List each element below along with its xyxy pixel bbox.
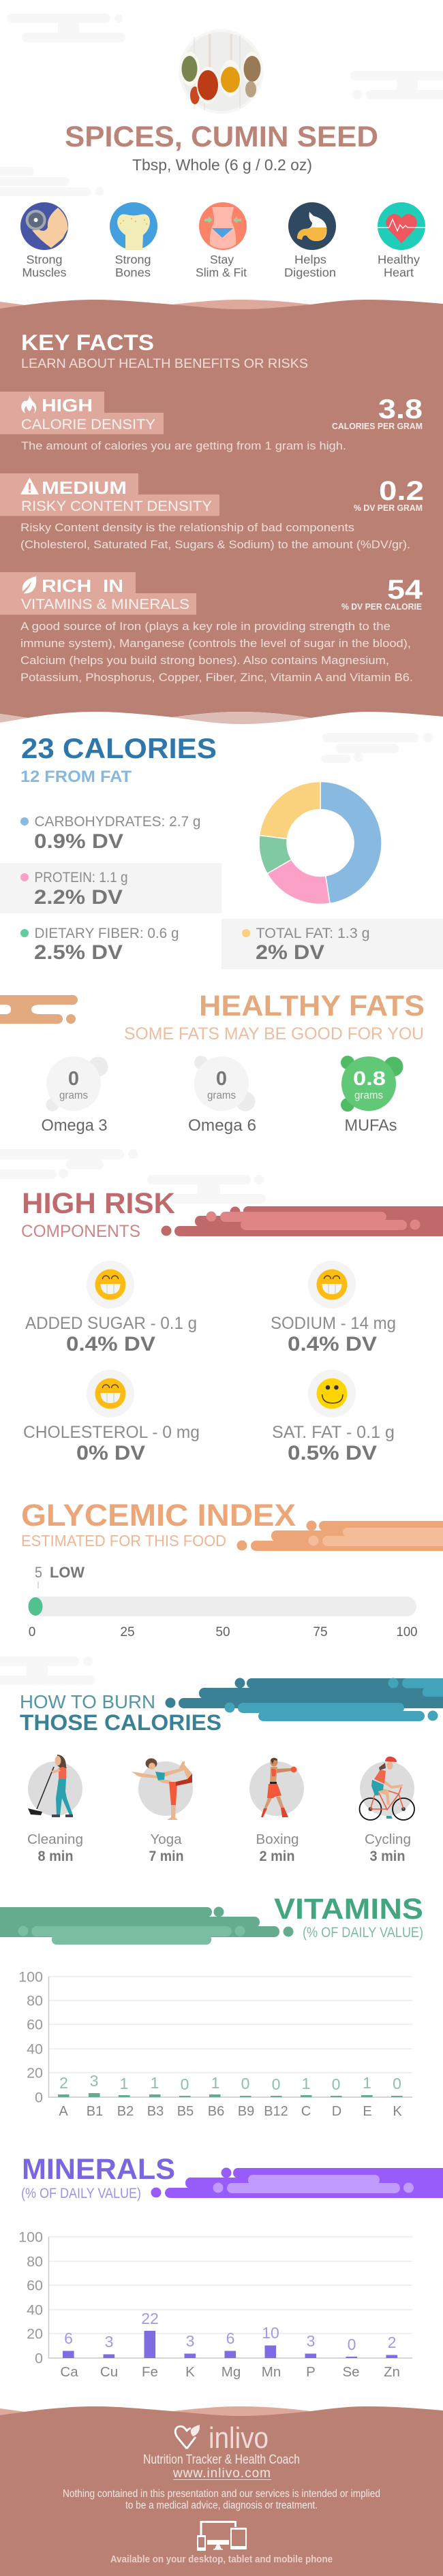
- banner decoration: [0, 1907, 293, 1945]
- bar chart: minerals: 3: [186, 2332, 194, 2350]
- item: cholesterol: 0% DV: [76, 1442, 145, 1464]
- bar chart: minerals: 100: [18, 2229, 43, 2245]
- stat: omega 6: 0: [216, 1068, 227, 1090]
- banner decoration: [237, 1520, 443, 1551]
- item: saturated fat: [272, 1370, 395, 1464]
- activity label: yoga: 7 min: [149, 1849, 184, 1864]
- bar chart: vitamins: B12: [264, 2104, 288, 2119]
- bar chart: vitamins: 0: [241, 2075, 249, 2092]
- banner decoration: [0, 995, 78, 1024]
- stat: omega 3: [41, 1056, 108, 1135]
- bar chart: minerals: Cu: [100, 2364, 118, 2380]
- panel: glycemic index: [21, 1498, 443, 1639]
- fact: rich in vitamins and minerals: RICH IN: [42, 576, 123, 596]
- gauge bar: [29, 1597, 416, 1616]
- gauge axis labels: 75: [313, 1625, 328, 1639]
- activity label: cycling: [365, 1832, 411, 1864]
- heading: glycemic index: GLYCEMIC INDEX: [21, 1498, 296, 1533]
- bar chart: vitamins: B2: [117, 2104, 134, 2119]
- donut chart: [259, 781, 382, 905]
- stat: omega 6: grams: [207, 1090, 236, 1101]
- heading: calories: 23 CALORIES: [21, 732, 217, 764]
- subheading: ESTIMATED FOR THIS FOOD: [21, 1532, 226, 1550]
- item: sodium: 0.4% DV: [288, 1333, 377, 1355]
- activity: boxing: [249, 1757, 304, 1817]
- bar chart: vitamins: B5: [177, 2104, 194, 2119]
- bar chart: vitamins: K: [393, 2104, 402, 2119]
- fact: calorie density: HIGH: [42, 395, 93, 415]
- gauge axis labels: 0: [29, 1625, 35, 1639]
- bar chart: vitamins: B1: [87, 2104, 103, 2119]
- item: sodium: [271, 1261, 396, 1355]
- icon: warning triangle: [20, 477, 39, 494]
- item: cholesterol: [23, 1370, 200, 1464]
- activity: cleaning: [28, 1755, 82, 1817]
- subheading: from fat: 12 FROM FAT: [20, 768, 132, 786]
- bar chart: vitamins: A: [59, 2104, 68, 2119]
- activity label: yoga: Yoga: [150, 1832, 182, 1847]
- legend: protein: 2.2% DV: [34, 886, 123, 909]
- fact: rich in vitamins and minerals: % DV PER CALORIE: [341, 601, 422, 612]
- item: added sugar: [25, 1261, 197, 1355]
- bar chart: vitamins: 2: [59, 2074, 68, 2092]
- legend: dietary fiber: [20, 926, 179, 964]
- panel: calories: [0, 732, 443, 969]
- bar chart: vitamins: 0: [35, 2090, 43, 2106]
- bar chart: minerals: 40: [27, 2302, 43, 2319]
- disclaimer: [63, 2488, 380, 2511]
- fact: rich in vitamins and minerals: immune system), Manganese (controls the level of sugar in the blood),: [20, 638, 411, 650]
- bar chart: vitamins: 0: [332, 2075, 340, 2093]
- item: saturated fat: 0.5% DV: [288, 1442, 377, 1464]
- icon: helps digestion: Helps: [294, 253, 326, 266]
- stat: MUFAs: MUFAs: [345, 1116, 397, 1135]
- panel: footer: [0, 2406, 443, 2576]
- heading: minerals: MINERALS: [22, 2153, 175, 2186]
- fact: risky content density: (Cholesterol, Saturated Fat, Sugars & Sodium) to the amount (%DV/gr).: [20, 539, 410, 551]
- legend: dietary fiber: 2.5% DV: [34, 941, 123, 964]
- activity: cycling: [360, 1757, 414, 1820]
- gauge value: [35, 1564, 85, 1588]
- stat: omega 6: Omega 6: [188, 1116, 256, 1135]
- icon: healthy heart: Heart: [384, 266, 414, 279]
- item: added sugar: 0.4% DV: [66, 1333, 155, 1355]
- gauge value: LOW: [50, 1564, 85, 1581]
- bar chart: vitamins: 20: [27, 2065, 43, 2082]
- bar chart: minerals: 3: [105, 2333, 113, 2351]
- bar chart: minerals: 10: [262, 2324, 279, 2342]
- heading: those calories: THOSE CALORIES: [20, 1710, 222, 1735]
- bar chart: vitamins: 60: [27, 2016, 43, 2032]
- fact: calorie density: CALORIE DENSITY: [21, 417, 155, 433]
- fact: calorie density: [0, 392, 423, 452]
- fact: risky content density: % DV PER GRAM: [354, 503, 423, 513]
- stat: omega 3: Omega 3: [41, 1116, 108, 1135]
- heading: vitamins: VITAMINS: [274, 1893, 423, 1926]
- bar chart: minerals: Ca: [60, 2364, 78, 2380]
- stat: MUFAs: [341, 1056, 403, 1135]
- website link: www.inlivo.com: [172, 2466, 271, 2481]
- bar chart: vitamins: E: [363, 2104, 372, 2119]
- bar chart: vitamins: B6: [208, 2104, 224, 2119]
- icon: strong muscles: Strong: [26, 253, 63, 266]
- bar chart: vitamins: C: [301, 2104, 311, 2119]
- bar chart: vitamins: 80: [27, 1993, 43, 2009]
- bar chart: vitamins: 1: [151, 2074, 159, 2092]
- item: saturated fat: SAT. FAT - 0.1 g: [272, 1423, 395, 1442]
- subheading: components: COMPONENTS: [21, 1222, 140, 1241]
- fact: rich in vitamins and minerals: VITAMINS & MINERALS: [21, 597, 189, 612]
- bar chart: vitamins: 0: [272, 2075, 280, 2093]
- bar chart: vitamins: D: [332, 2104, 341, 2119]
- panel: healthy fats: [0, 990, 425, 1135]
- bar chart: minerals: Mn: [262, 2364, 281, 2380]
- legend: protein: [20, 870, 128, 909]
- panel: minerals: [18, 2153, 443, 2380]
- subheading: percent of daily value: (% OF DAILY VALUE): [21, 2186, 141, 2201]
- stat: omega 3: 0: [68, 1068, 79, 1090]
- bar chart: vitamins: 1: [363, 2074, 371, 2092]
- icon: healthy heart: [378, 202, 425, 279]
- fact: calorie density: The amount of calories you are getting from 1 gram is high.: [21, 440, 346, 452]
- fact: risky content density: MEDIUM: [42, 477, 127, 498]
- bar chart: vitamins: 3: [90, 2072, 98, 2090]
- bar chart: minerals: Fe: [142, 2364, 158, 2380]
- activity label: cycling: 3 min: [369, 1849, 405, 1864]
- disclaimer: to be a medical advice, diagnosis or treatment.: [125, 2500, 318, 2511]
- item: cholesterol: CHOLESTEROL - 0 mg: [23, 1423, 200, 1442]
- icon: strong muscles: Muscles: [22, 266, 67, 279]
- bar chart: minerals: 0: [35, 2350, 43, 2366]
- fact: calorie density: 3.8: [378, 394, 423, 424]
- gauge axis labels: [29, 1625, 417, 1639]
- bar chart: minerals: 80: [27, 2253, 43, 2269]
- activity label: cleaning: Cleaning: [27, 1832, 83, 1847]
- legend: carbohydrates: [20, 814, 200, 853]
- bar chart: vitamins: 0: [393, 2075, 401, 2092]
- icon: strong muscles: [20, 202, 68, 279]
- item: added sugar: ADDED SUGAR - 0.1 g: [25, 1314, 197, 1333]
- heading: key facts: KEY FACTS: [21, 330, 154, 355]
- logo: inlivo: [175, 2421, 269, 2455]
- gauge axis labels: 50: [215, 1625, 230, 1639]
- legend: protein: PROTEIN: 1.1 g: [34, 870, 128, 885]
- icon: slim and fit: Stay: [210, 253, 234, 266]
- availability note: Available on your desktop, tablet and mobile phone: [110, 2554, 333, 2565]
- icon: healthy heart: Healthy: [378, 253, 420, 266]
- icon: desktop, tablet and mobile: [197, 2521, 247, 2551]
- bar chart: minerals: P: [306, 2364, 316, 2380]
- activity label: cycling: Cycling: [365, 1832, 411, 1847]
- activity label: boxing: Boxing: [256, 1832, 299, 1847]
- bar chart: minerals: Mg: [222, 2364, 241, 2380]
- legend: carbohydrates: CARBOHYDRATES: 2.7 g: [34, 814, 200, 830]
- heading: how to burn: HOW TO BURN: [20, 1691, 155, 1712]
- panel: vitamins: [0, 1893, 423, 2119]
- icon: strong bones: Strong: [114, 253, 151, 266]
- gauge axis labels: 100: [397, 1625, 417, 1639]
- food photo: spices on spoons: [179, 29, 263, 114]
- fact: risky content density: RISKY CONTENT DENSITY: [21, 499, 212, 514]
- serving subtitle: Tbsp, Whole (6 g / 0.2 oz): [132, 156, 312, 174]
- banner decoration: [151, 2167, 443, 2198]
- gauge axis labels: 25: [120, 1625, 135, 1639]
- bar chart: minerals: [18, 2229, 412, 2380]
- subheading: SOME FATS MAY BE GOOD FOR YOU: [124, 1024, 424, 1043]
- subheading: LEARN ABOUT HEALTH BENEFITS OR RISKS: [21, 356, 308, 371]
- icon: flame: [21, 395, 36, 413]
- heading: healthy fats: HEALTHY FATS: [199, 990, 425, 1022]
- icon: leaf: [22, 576, 36, 593]
- bar chart: minerals: 60: [27, 2278, 43, 2294]
- item: sodium: SODIUM - 14 mg: [271, 1314, 396, 1333]
- panel: high risk components: [21, 1187, 443, 1464]
- panel: key facts: [0, 300, 443, 724]
- legend: total fat: TOTAL FAT: 1.3 g: [256, 926, 370, 941]
- activity label: boxing: 2 min: [259, 1849, 294, 1864]
- bar chart: minerals: Zn: [384, 2364, 400, 2380]
- fact: rich in vitamins and minerals: A good source of Iron (plays a key role in providing strength to the: [20, 621, 391, 633]
- benefit icons row: [20, 202, 425, 279]
- stat: MUFAs: grams: [354, 1090, 383, 1101]
- fact: rich in vitamins and minerals: 54: [387, 575, 423, 605]
- subheading: percent of daily value: (% OF DAILY VALUE): [303, 1925, 423, 1941]
- fact: rich in vitamins and minerals: Calcium (helps you build strong bones). Also contains Magnesium,: [20, 655, 389, 667]
- bar chart: minerals: K: [185, 2364, 195, 2380]
- gauge value: 5: [35, 1564, 42, 1581]
- title: SPICES, CUMIN SEED: [65, 121, 378, 153]
- tagline: Nutrition Tracker & Health Coach: [143, 2453, 300, 2467]
- fact: risky content density: 0.2: [379, 476, 424, 506]
- activity label: cleaning: [27, 1832, 83, 1864]
- legend: dietary fiber: DIETARY FIBER: 0.6 g: [34, 926, 179, 941]
- fact: rich in vitamins and minerals: Potassium, Phosphorus, Copper, Fiber, Zinc, Vitamin A and Vitamin B6.: [20, 672, 413, 684]
- activity: yoga: [132, 1759, 193, 1820]
- activity label: yoga: [149, 1832, 184, 1864]
- panel: how to burn those calories: [20, 1678, 443, 1864]
- fact: risky content density: [0, 473, 424, 551]
- legend: carbohydrates: 0.9% DV: [34, 830, 123, 853]
- bar chart: vitamins: 1: [120, 2075, 128, 2092]
- icon: strong bones: Bones: [115, 266, 151, 279]
- legend: total fat: [242, 926, 370, 964]
- bar chart: vitamins: B3: [147, 2104, 164, 2119]
- bar chart: vitamins: 1: [211, 2074, 219, 2092]
- stat: MUFAs: 0.8: [353, 1068, 386, 1090]
- bar chart: minerals: 20: [27, 2325, 43, 2342]
- stat: omega 6: [188, 1056, 256, 1135]
- activity label: cleaning: 8 min: [38, 1849, 74, 1864]
- bar chart: vitamins: 1: [302, 2075, 310, 2092]
- icon: helps digestion: Digestion: [284, 266, 336, 279]
- activity label: boxing: [256, 1832, 299, 1864]
- bar chart: vitamins: 40: [27, 2041, 43, 2057]
- fact: rich in vitamins and minerals: [0, 572, 423, 684]
- icon: helps digestion: [284, 202, 336, 279]
- bar chart: vitamins: 0: [181, 2075, 189, 2093]
- bar chart: minerals: 22: [141, 2310, 159, 2327]
- disclaimer: Nothing contained in this presentation and our services is intended or implied: [63, 2488, 380, 2500]
- bar chart: vitamins: B9: [238, 2104, 254, 2119]
- bar chart: minerals: Se: [342, 2364, 360, 2380]
- bar chart: minerals: 2: [388, 2334, 396, 2351]
- heading: high risk: HIGH RISK: [22, 1187, 175, 1220]
- fact: calorie density: CALORIES PER GRAM: [332, 421, 423, 431]
- bar chart: vitamins: [18, 1968, 412, 2119]
- bar chart: minerals: 6: [226, 2329, 234, 2347]
- stat: omega 3: grams: [59, 1090, 88, 1101]
- banner decoration: [165, 1678, 443, 1721]
- bar chart: vitamins: 100: [18, 1968, 43, 1985]
- icon: slim and fit: [196, 202, 247, 279]
- banner decoration: [161, 1206, 443, 1236]
- bar chart: minerals: 6: [64, 2329, 73, 2347]
- logo: inlivo: inlivo: [209, 2421, 269, 2455]
- icon: strong bones: [110, 202, 157, 279]
- bar chart: minerals: 3: [307, 2332, 315, 2350]
- icon: slim and fit: Slim & Fit: [196, 266, 247, 279]
- bar chart: minerals: 0: [348, 2336, 356, 2353]
- fact: risky content density: Risky Content density is the relationship of bad components: [20, 522, 354, 534]
- legend: total fat: 2% DV: [256, 941, 324, 964]
